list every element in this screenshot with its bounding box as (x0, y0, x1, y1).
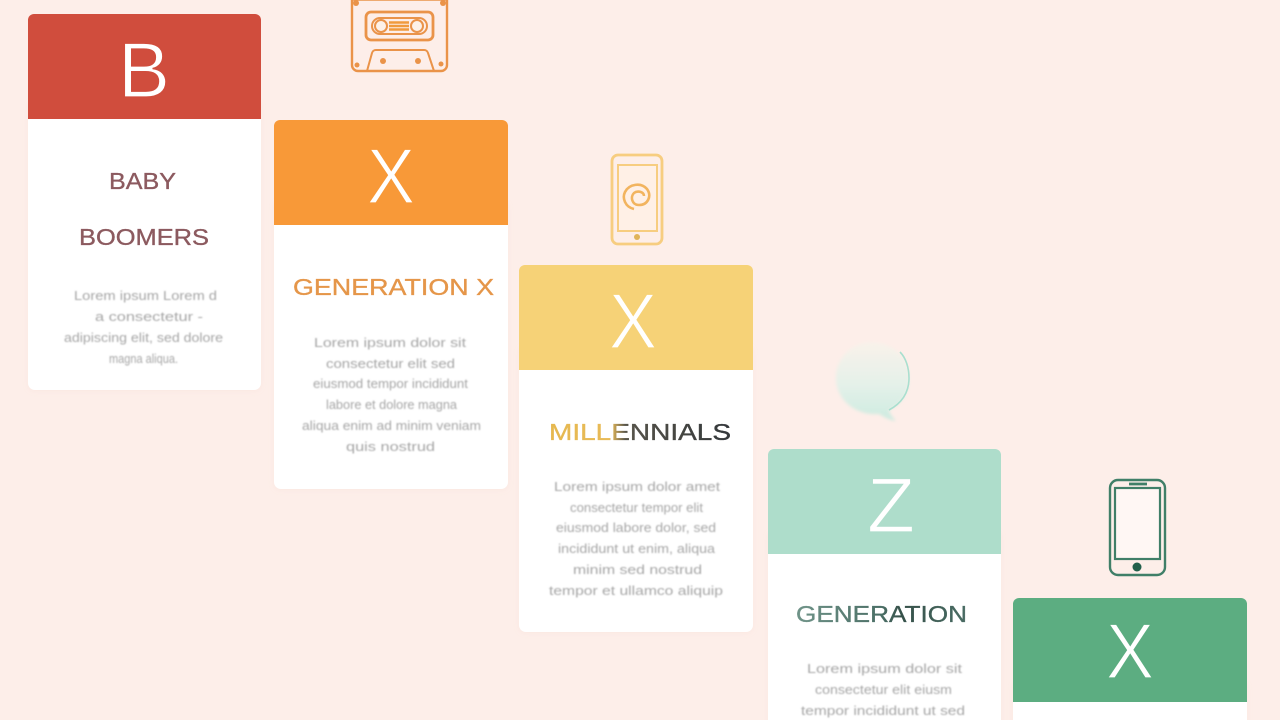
card body: millennials (519, 345, 753, 632)
header: generation x (274, 120, 508, 225)
description: millennials: tempor et ullamco aliquip (549, 583, 723, 598)
heading: generation z: GENERATION (796, 601, 967, 627)
heading: baby boomers: BABY (109, 168, 176, 194)
icon: speech bubble (836, 342, 909, 421)
panel: generation x (274, 120, 508, 489)
description: baby boomers: adipiscing elit, sed dolore (64, 330, 223, 345)
description: generation x (302, 335, 481, 454)
description: millennials: incididunt ut enim, aliqua (558, 541, 716, 556)
description: baby boomers (64, 288, 223, 366)
heading: generation x: GENERATION X (293, 274, 494, 300)
card body: generation x (274, 200, 508, 489)
description: generation z (801, 661, 965, 718)
heading: baby boomers (79, 168, 209, 250)
heading: millennials: MILLENNIALS (549, 419, 731, 445)
description: millennials: Lorem ipsum dolor amet (554, 479, 720, 494)
description: generation z: consectetur elit eiusm (815, 682, 952, 697)
description: millennials: minim sed nostrud (573, 562, 702, 577)
icon: cassette tape (352, 0, 447, 71)
letter B: B (118, 26, 170, 114)
card body: generation z (768, 530, 1001, 720)
panel: baby boomers (28, 14, 261, 390)
letter X: X (367, 132, 415, 220)
letter Z: Z (867, 461, 915, 549)
letter X: X (609, 277, 657, 365)
header: baby boomers (28, 14, 261, 119)
card body: baby boomers (28, 100, 261, 390)
description: millennials: eiusmod labore dolor, sed (556, 520, 716, 535)
description: generation x: consectetur elit sed (326, 356, 455, 371)
header: fifth generation (1013, 598, 1247, 702)
icon: green phone (1110, 480, 1165, 575)
description: generation x: eiusmod tempor incididunt (313, 376, 468, 391)
description: baby boomers: magna aliqua. (109, 351, 178, 366)
panel: fifth generation (1013, 598, 1247, 720)
icon: phone with spiral (612, 155, 662, 244)
heading: baby boomers: BOOMERS (79, 224, 209, 250)
card body: fifth generation (1013, 680, 1247, 720)
header: generation z (768, 449, 1001, 554)
description: millennials: consectetur tempor elit (570, 500, 703, 515)
description: generation x: aliqua enim ad minim veniam (302, 418, 481, 433)
header: millennials (519, 265, 753, 370)
description: generation z: Lorem ipsum dolor sit (807, 661, 962, 676)
panel: millennials (519, 265, 753, 632)
panel: generation z (768, 449, 1001, 720)
description: millennials (549, 479, 723, 598)
description: generation x: labore et dolore magna (326, 397, 458, 412)
description: generation x: quis nostrud (346, 439, 435, 454)
description: generation z: tempor incididunt ut sed (801, 703, 965, 718)
letter X: X (1106, 607, 1154, 695)
description: generation x: Lorem ipsum dolor sit (314, 335, 466, 350)
description: baby boomers: a consectetur - (95, 309, 203, 324)
description: baby boomers: Lorem ipsum Lorem d (74, 288, 217, 303)
